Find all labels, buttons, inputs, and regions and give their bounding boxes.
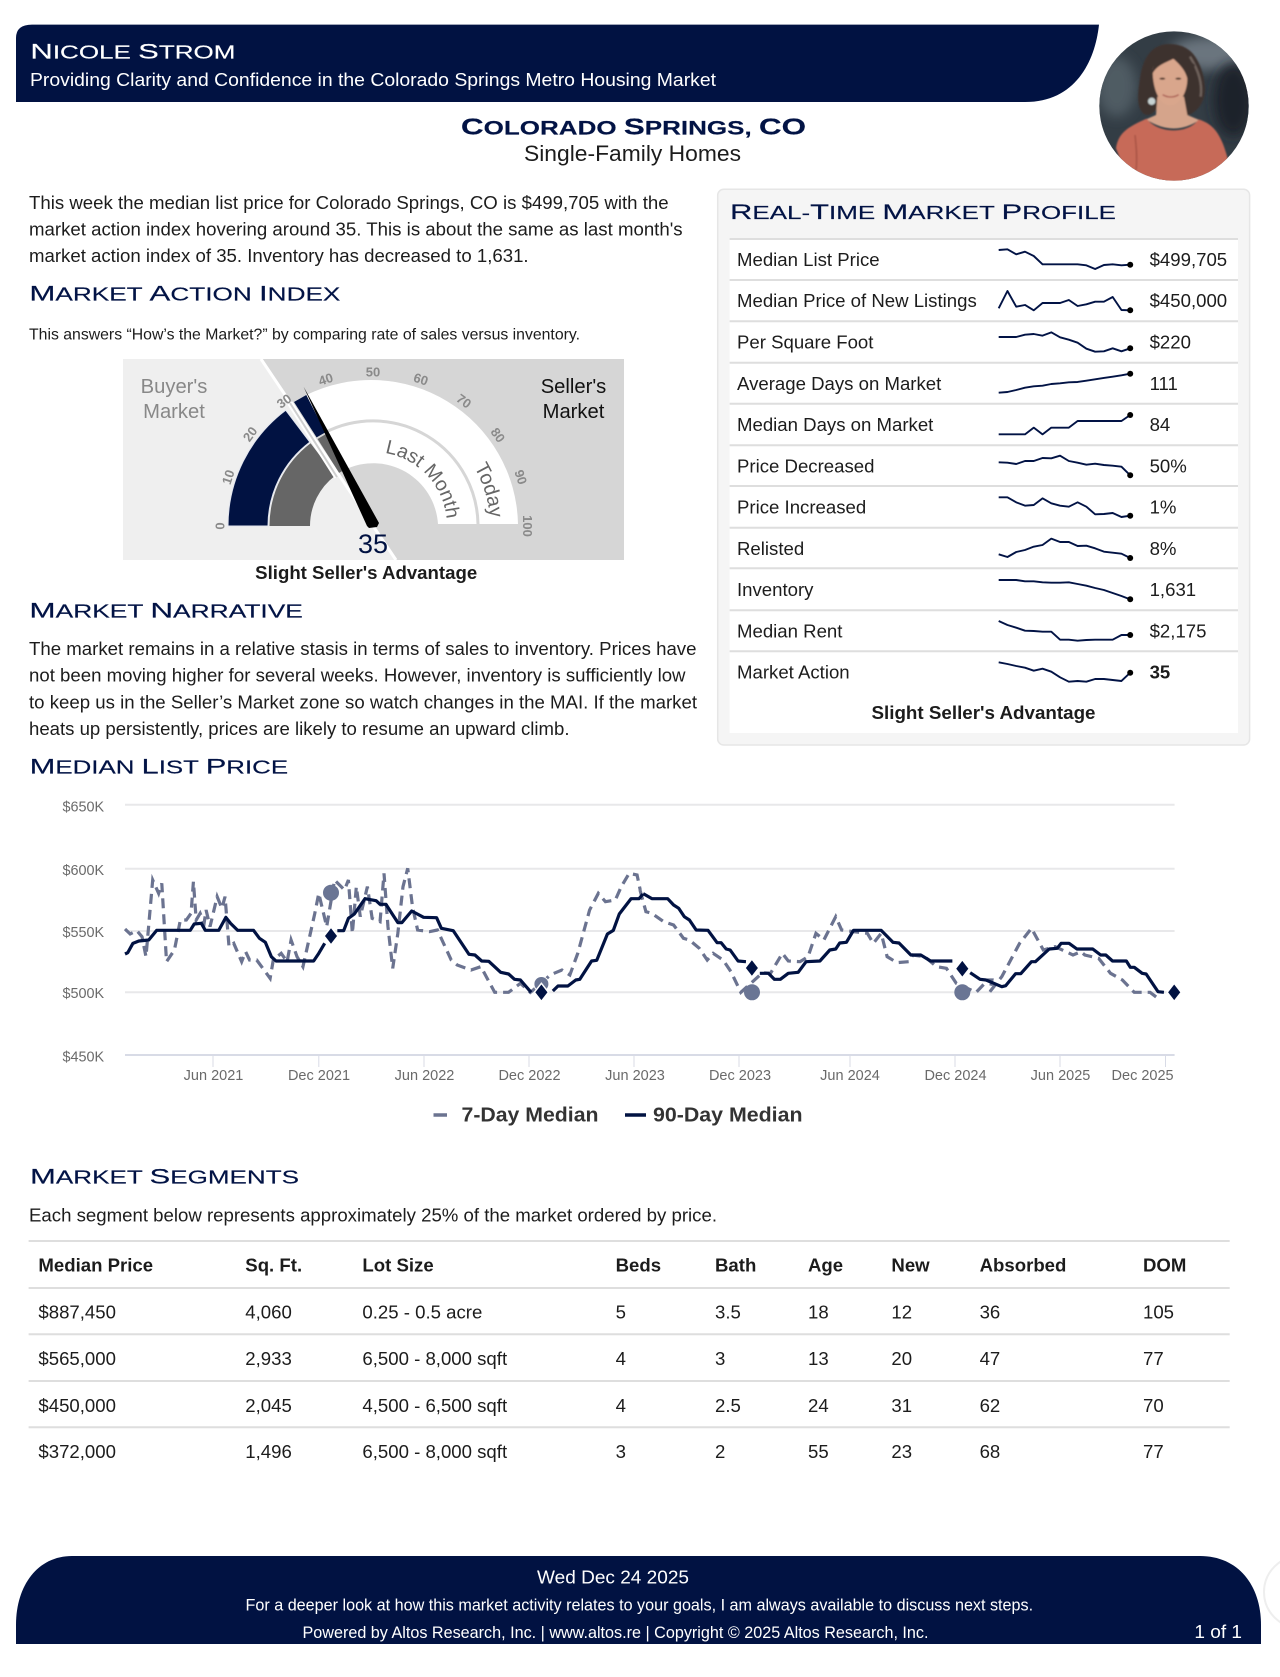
x axis ticks and labels: Dec 2022 bbox=[498, 1068, 561, 1084]
last month arc label: Last Month bbox=[386, 440, 460, 518]
row: relisted: Relisted bbox=[737, 538, 804, 559]
gauge tick labels: 20 bbox=[240, 424, 260, 444]
row: price decreased: 50% bbox=[1150, 456, 1187, 476]
seller's market label: Market bbox=[543, 401, 605, 423]
location title bbox=[461, 113, 806, 166]
row: median price of new listings: Median Price of New Listings bbox=[737, 290, 977, 311]
neck and chest bbox=[1146, 97, 1199, 129]
face bbox=[1153, 58, 1187, 105]
market narrative paragraph: The market remains in a relative stasis in terms of sales to inventory. Prices have bbox=[29, 638, 696, 659]
tagline: Providing Clarity and Confidence in the Colorado Springs Metro Housing Market bbox=[30, 69, 716, 90]
table row 3: $450,000 bbox=[38, 1395, 116, 1416]
table row 4: 1,496 bbox=[245, 1441, 292, 1462]
row: relisted bbox=[737, 538, 1176, 561]
y axis grid and labels bbox=[62, 800, 1175, 1066]
table row 1: 18 bbox=[808, 1302, 829, 1323]
heading: market narrative: M ARKET N ARRATIVE bbox=[29, 598, 303, 622]
table row 2: 47 bbox=[980, 1348, 1000, 1369]
row: inventory: Inventory bbox=[737, 579, 814, 600]
table row 2: 77 bbox=[1143, 1348, 1164, 1369]
table header row: Bath bbox=[715, 1255, 756, 1276]
table row 3: 31 bbox=[891, 1395, 912, 1416]
row: median list price bbox=[737, 249, 1227, 270]
table row 3: 2.5 bbox=[715, 1395, 741, 1416]
table row 2: 3 bbox=[715, 1348, 725, 1369]
x axis ticks and labels: Dec 2024 bbox=[924, 1068, 987, 1084]
row: inventory: 1,631 bbox=[1150, 579, 1196, 600]
table row 1: 0.25 - 0.5 acre bbox=[362, 1302, 482, 1323]
table header row: Sq. Ft. bbox=[245, 1255, 302, 1276]
row: average days on market: Average Days on Market bbox=[737, 373, 942, 394]
row: per square foot bbox=[737, 332, 1191, 353]
x axis ticks and labels: Jun 2023 bbox=[605, 1068, 665, 1084]
table row 3: 2,045 bbox=[245, 1395, 292, 1416]
today navy band bbox=[228, 410, 310, 526]
x axis ticks and labels: Jun 2022 bbox=[395, 1068, 454, 1084]
90-day median markers bbox=[324, 927, 1181, 1001]
chart legend bbox=[434, 1104, 802, 1127]
row: market action bbox=[737, 662, 1170, 683]
gauge tick labels: 0 bbox=[212, 522, 227, 530]
table row 4: 77 bbox=[1143, 1441, 1164, 1462]
agent name: N ICOLE S TROM bbox=[30, 39, 235, 63]
table row 4: 2 bbox=[715, 1441, 725, 1462]
table row 4: 23 bbox=[891, 1441, 912, 1462]
corner widget bbox=[1264, 1556, 1280, 1628]
property type subtitle: Single-Family Homes bbox=[524, 141, 741, 166]
row: price increased bbox=[737, 497, 1176, 519]
gauge tick labels: 80 bbox=[488, 425, 508, 445]
table header row: Absorbed bbox=[980, 1255, 1066, 1276]
gauge tick labels: 40 bbox=[317, 370, 335, 389]
seller's market label: Seller's bbox=[541, 376, 606, 398]
gauge tick labels: 30 bbox=[274, 391, 294, 411]
buyer's market label bbox=[141, 376, 207, 423]
row dividers bbox=[730, 239, 1238, 651]
footer date: Wed Dec 24 2025 bbox=[537, 1566, 689, 1587]
y axis grid and labels: $450K bbox=[62, 1050, 105, 1066]
x axis ticks and labels: Dec 2025 bbox=[1112, 1068, 1174, 1084]
x axis ticks and labels: Jun 2024 bbox=[820, 1068, 880, 1084]
table row 3: 24 bbox=[808, 1395, 829, 1416]
market segments description: Each segment below represents approximately 25% of the market ordered by price. bbox=[29, 1204, 717, 1225]
table row 4: 68 bbox=[980, 1441, 1000, 1462]
table row 3: 4,500 - 6,500 sqft bbox=[362, 1395, 508, 1416]
table row 1: 4,060 bbox=[245, 1302, 292, 1323]
table row 1 bbox=[38, 1302, 1174, 1323]
table row 4: 3 bbox=[616, 1441, 626, 1462]
heading: median list price: M EDIAN L IST P RICE bbox=[30, 755, 288, 779]
y axis grid and labels: $650K bbox=[62, 800, 105, 816]
location title: C OLORADO S PRINGS, CO bbox=[461, 113, 806, 139]
intro paragraph bbox=[29, 192, 683, 266]
chart legend: 7-Day Median bbox=[462, 1104, 598, 1127]
table row 4 bbox=[38, 1441, 1164, 1462]
x axis ticks and labels bbox=[184, 1055, 1174, 1084]
row: median list price: Median List Price bbox=[737, 249, 880, 270]
panel heading: R EAL- T IME M ARKET P ROFILE bbox=[730, 200, 1116, 224]
table row 2: $565,000 bbox=[38, 1348, 116, 1369]
heading: market action index: M ARKET A CTION INDEX bbox=[29, 282, 340, 306]
table row 4: 55 bbox=[808, 1441, 829, 1462]
gauge value: 35 bbox=[358, 529, 388, 559]
row: market action: 35 bbox=[1150, 662, 1170, 683]
row: median days on market bbox=[737, 412, 1170, 435]
x axis ticks and labels: Jun 2021 bbox=[184, 1068, 243, 1084]
header banner bbox=[16, 25, 1099, 102]
table header row: Beds bbox=[616, 1255, 661, 1276]
7-day median series bbox=[125, 868, 1158, 998]
table row 1: 3.5 bbox=[715, 1302, 741, 1323]
table row 3: 4 bbox=[616, 1395, 626, 1416]
row: average days on market: 111 bbox=[1150, 373, 1178, 394]
market narrative paragraph: heats up persistently, prices are likely to resume an upward climb. bbox=[29, 718, 570, 739]
table row 1: 105 bbox=[1143, 1302, 1174, 1323]
market narrative paragraph bbox=[29, 638, 697, 739]
row: median price of new listings bbox=[737, 290, 1227, 313]
table header row bbox=[38, 1255, 1186, 1276]
table row 4: $372,000 bbox=[38, 1441, 116, 1462]
table row 2: 2,933 bbox=[245, 1348, 292, 1369]
hair bbox=[1138, 44, 1205, 116]
gauge caption: Slight Seller's Advantage bbox=[255, 562, 477, 583]
table header row: Lot Size bbox=[362, 1255, 434, 1276]
table row 1: 12 bbox=[891, 1302, 912, 1323]
table row 3 bbox=[38, 1395, 1164, 1416]
gauge tick labels bbox=[212, 364, 535, 537]
heading: market segments: M ARKET S EGMENTS bbox=[30, 1165, 299, 1189]
table: market segments bbox=[29, 1241, 1230, 1462]
row: inventory bbox=[737, 579, 1196, 602]
market narrative paragraph: not been moving higher for several weeks. However, inventory is sufficiently low bbox=[29, 665, 686, 686]
footer credits: Powered by Altos Research, Inc. | www.altos.re | Copyright © 2025 Altos Research, Inc. bbox=[302, 1624, 928, 1642]
needle bbox=[304, 387, 379, 528]
row: median price of new listings: $450,000 bbox=[1150, 290, 1227, 311]
row: price increased: 1% bbox=[1150, 497, 1176, 518]
90-day median series bbox=[125, 894, 1164, 992]
x axis ticks and labels: Dec 2023 bbox=[709, 1068, 771, 1084]
y axis grid and labels: $600K bbox=[62, 863, 105, 879]
market narrative paragraph: to keep us in the Seller’s Market zone so watch changes in the MAI. If the market bbox=[29, 691, 697, 712]
row: price decreased bbox=[737, 456, 1187, 478]
table row 4: 6,500 - 8,000 sqft bbox=[362, 1441, 508, 1462]
threshold marker bbox=[290, 403, 337, 477]
row: per square foot: Per Square Foot bbox=[737, 332, 874, 353]
table row 2 bbox=[38, 1348, 1164, 1369]
agent photo bbox=[1097, 30, 1253, 183]
7-day median markers bbox=[323, 885, 970, 1000]
chart legend: 90-Day Median bbox=[653, 1104, 802, 1127]
table row 3: 62 bbox=[980, 1395, 1000, 1416]
row: price increased: Price Increased bbox=[737, 497, 866, 518]
gauge tick labels: 100 bbox=[520, 515, 535, 537]
last month grey band bbox=[269, 443, 335, 526]
gauge tick labels: 90 bbox=[511, 468, 530, 486]
x axis ticks and labels: Dec 2021 bbox=[288, 1068, 350, 1084]
top bbox=[1116, 119, 1227, 183]
gauge tick labels: 50 bbox=[366, 364, 380, 379]
market action index description: This answers “How’s the Market?” by comparing rate of sales versus inventory. bbox=[29, 326, 580, 343]
gauge tick labels: 60 bbox=[412, 370, 430, 389]
seller's market label bbox=[541, 376, 606, 423]
gauge: market action index bbox=[123, 359, 624, 560]
panel caption: Slight Seller's Advantage bbox=[872, 702, 1096, 723]
y axis grid and labels: $550K bbox=[62, 925, 105, 941]
table row 3: 70 bbox=[1143, 1395, 1164, 1416]
buyer's market label: Market bbox=[143, 401, 205, 423]
footer message: For a deeper look at how this market activity relates to your goals, I am always available to discuss next steps. bbox=[246, 1597, 1033, 1615]
row: median days on market: 84 bbox=[1150, 414, 1170, 435]
table header row: DOM bbox=[1143, 1255, 1186, 1276]
table row 2: 4 bbox=[616, 1348, 626, 1369]
row: relisted: 8% bbox=[1150, 538, 1176, 559]
page number: 1 of 1 bbox=[1194, 1621, 1242, 1642]
table header row: New bbox=[891, 1255, 930, 1276]
intro paragraph: market action index hovering around 35. This is about the same as last month's bbox=[29, 218, 683, 240]
gauge tick labels: 10 bbox=[219, 468, 238, 486]
x axis ticks and labels: Jun 2025 bbox=[1031, 1068, 1090, 1084]
row: average days on market bbox=[737, 371, 1178, 394]
table row 2: 6,500 - 8,000 sqft bbox=[362, 1348, 508, 1369]
table row 1: 5 bbox=[616, 1302, 626, 1323]
panel: real-time market profile bbox=[718, 189, 1250, 745]
row: market action: Market Action bbox=[737, 662, 850, 683]
table row 2: 13 bbox=[808, 1348, 829, 1369]
table header row: Age bbox=[808, 1255, 843, 1276]
today arc label: Today bbox=[476, 461, 500, 516]
line chart: median list price bbox=[62, 800, 1181, 1127]
today and last month white arcs bbox=[306, 380, 518, 524]
row: price decreased: Price Decreased bbox=[737, 456, 874, 476]
gauge tick labels: 70 bbox=[454, 391, 474, 411]
buyer's market label: Buyer's bbox=[141, 376, 207, 398]
row: per square foot: $220 bbox=[1150, 332, 1191, 353]
row: median rent: Median Rent bbox=[737, 620, 843, 642]
y axis grid and labels: $500K bbox=[62, 986, 105, 1002]
table row 2: 20 bbox=[891, 1348, 912, 1369]
row: median list price: $499,705 bbox=[1150, 249, 1227, 270]
intro paragraph: This week the median list price for Colorado Springs, CO is $499,705 with the bbox=[29, 192, 669, 213]
intro paragraph: market action index of 35. Inventory has decreased to 1,631. bbox=[29, 245, 529, 266]
row: median rent: $2,175 bbox=[1150, 620, 1206, 642]
footer banner bbox=[16, 1556, 1261, 1644]
row: median days on market: Median Days on Market bbox=[737, 414, 934, 435]
row: median rent bbox=[737, 620, 1206, 642]
table row 1: 36 bbox=[980, 1302, 1000, 1323]
table row 1: $887,450 bbox=[38, 1302, 116, 1323]
table header row: Median Price bbox=[38, 1255, 153, 1276]
